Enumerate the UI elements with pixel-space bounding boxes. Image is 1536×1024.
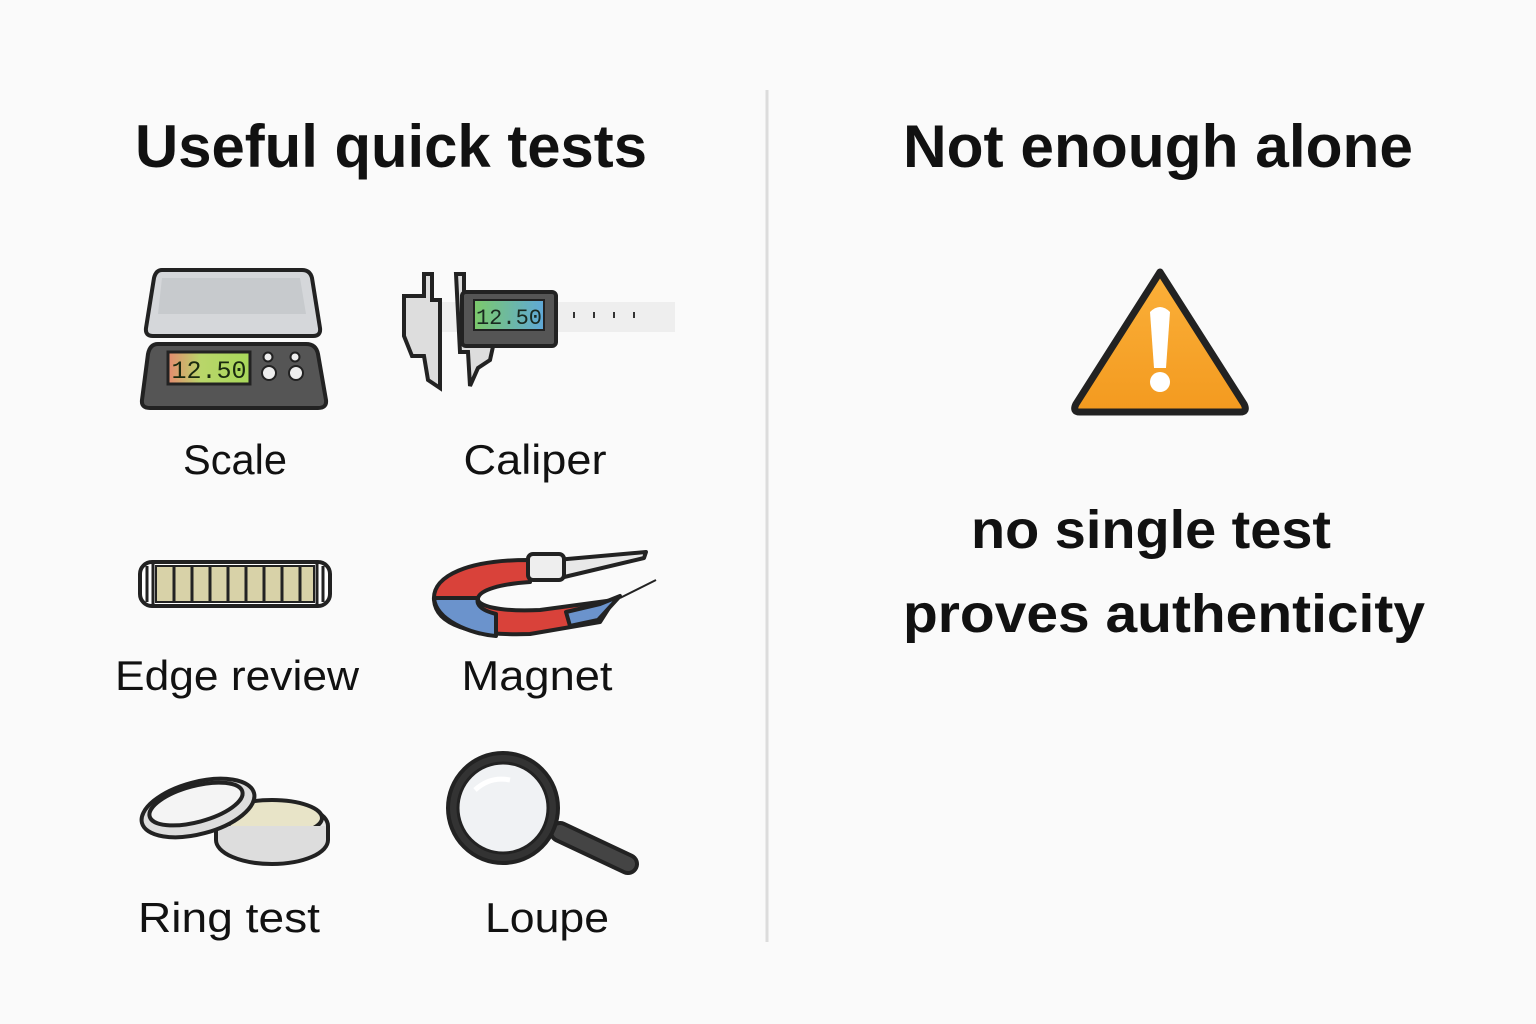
label: loupe: Loupe	[485, 894, 609, 941]
icon: edge review	[140, 562, 330, 606]
text: no single test proves authenticity: proves authenticity	[903, 584, 1425, 644]
label: scale: Scale	[183, 436, 287, 483]
text: no single test proves authenticity: no single test	[971, 500, 1331, 560]
icon: scale	[142, 270, 326, 408]
label: ring test: Ring test	[138, 894, 320, 941]
icon: ring test	[135, 768, 328, 864]
title: not enough alone: Not enough alone	[903, 113, 1413, 180]
icon: caliper: 12.50	[476, 306, 542, 331]
icon: warning	[1075, 272, 1245, 412]
icon: scale: 12.50	[171, 357, 247, 386]
label: edge review: Edge review	[115, 652, 360, 699]
label: caliper: Caliper	[464, 436, 607, 483]
icon: caliper	[404, 274, 675, 388]
title: useful quick tests: Useful quick tests	[135, 113, 647, 180]
label: magnet: Magnet	[462, 652, 613, 699]
icon: loupe	[448, 753, 628, 864]
text: no single test proves authenticity	[903, 500, 1425, 644]
icon: magnet	[434, 552, 656, 636]
